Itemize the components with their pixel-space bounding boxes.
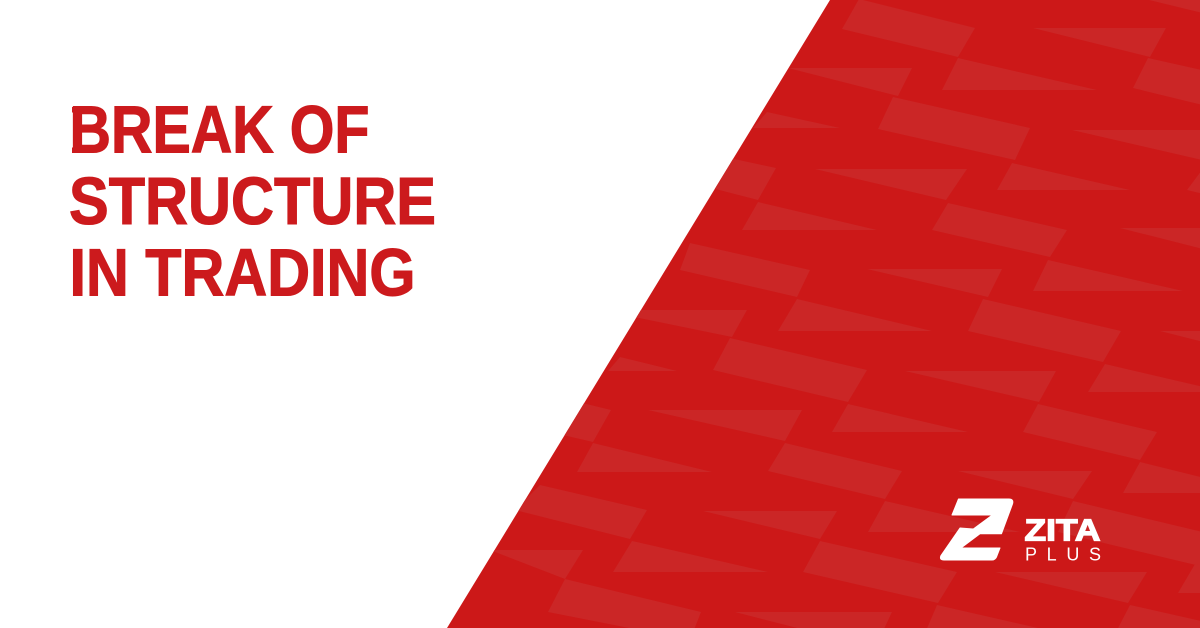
wordmark: PLUS: PLUS [1025,544,1101,564]
panel: red diagonal background [447,0,1200,628]
wordmark: ZITA: ZITA [1024,512,1100,548]
title line 2: STRUCTURE [69,165,436,239]
title [69,94,436,311]
background pattern: lighter parallelograms and wedges [490,0,1200,628]
logo: Zita Plus [940,499,1101,564]
title line 3: IN TRADING [70,237,416,311]
title line 1: BREAK OF [70,94,370,168]
icon: Z mark [940,499,1013,560]
